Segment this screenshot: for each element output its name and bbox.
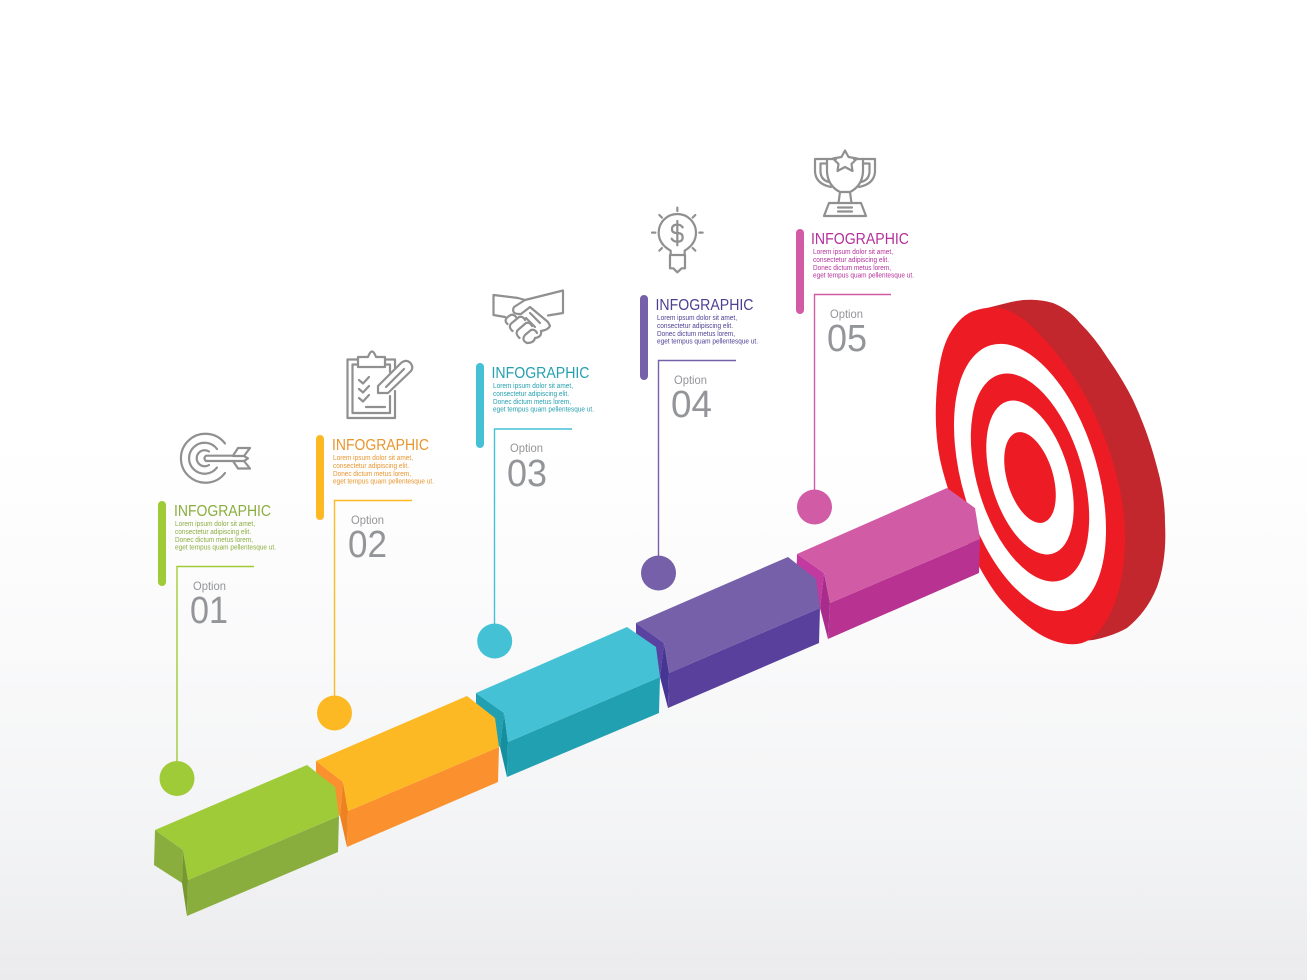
- marker 05: [797, 490, 832, 524]
- label 03: 03: [507, 453, 547, 495]
- marker 04: [641, 556, 676, 590]
- leader line 02: [334, 500, 412, 705]
- accent bar 01: [158, 501, 166, 586]
- body text 05: Donec dictum metus lorem,: [813, 265, 891, 272]
- heading 01: INFOGRAPHIC: [174, 503, 271, 520]
- accent bar 05: [796, 229, 804, 314]
- body text 04: consectetur adipiscing elit.: [657, 323, 733, 330]
- option 04 group: [640, 295, 758, 590]
- accent bar 04: [640, 295, 648, 380]
- leader line 04: [658, 360, 736, 565]
- body text 02: consectetur adipiscing elit.: [333, 463, 409, 470]
- body text 01: Donec dictum metus lorem,: [175, 537, 253, 544]
- body text 03: Lorem ipsum dolor sit amet,: [493, 383, 573, 390]
- body text 04: Donec dictum metus lorem,: [657, 331, 735, 338]
- icon: handshake: [494, 290, 563, 343]
- body text 04: Lorem ipsum dolor sit amet,: [657, 315, 737, 322]
- label 03: Option: [510, 441, 543, 455]
- segment 05: pink block: [796, 488, 980, 639]
- option 05 group: [796, 229, 914, 524]
- label 02: 02: [348, 524, 387, 566]
- body text 02: [333, 455, 434, 486]
- icon: light bulb with dollar: [652, 208, 703, 272]
- segment 03: teal block: [476, 627, 660, 777]
- segment 04: purple block: [636, 557, 820, 708]
- body text 05: Lorem ipsum dolor sit amet,: [813, 249, 893, 256]
- body text 01: consectetur adipiscing elit.: [175, 529, 251, 536]
- body text 02: eget tempus quam pellentesque ut.: [333, 478, 434, 486]
- body text 03: eget tempus quam pellentesque ut.: [493, 406, 594, 414]
- icon: target with arrow: [181, 434, 250, 483]
- label 02: Option: [351, 513, 384, 527]
- body text 03: [493, 383, 594, 414]
- segment 02: orange block: [316, 696, 499, 847]
- body text 03: consectetur adipiscing elit.: [493, 391, 569, 398]
- accent bar 03: [476, 363, 484, 448]
- heading 05: INFOGRAPHIC: [811, 231, 909, 248]
- icon: clipboard with pencil: [348, 352, 412, 418]
- body text 01: [175, 521, 276, 552]
- option 03 group: [476, 363, 594, 658]
- option 02 group: [316, 435, 434, 730]
- body text 02: Donec dictum metus lorem,: [333, 471, 411, 478]
- body text 01: eget tempus quam pellentesque ut.: [175, 544, 276, 552]
- label 05: 05: [827, 318, 867, 360]
- icon: trophy with star: [815, 150, 875, 216]
- label 05: Option: [830, 307, 863, 321]
- label 01: Option: [193, 579, 226, 593]
- segment 01: green block: [154, 765, 339, 916]
- body text 04: [657, 315, 758, 346]
- label 01: 01: [190, 590, 228, 632]
- leader line 05: [814, 294, 891, 499]
- body text 05: [813, 249, 914, 280]
- body text 01: Lorem ipsum dolor sit amet,: [175, 521, 255, 528]
- body text 05: eget tempus quam pellentesque ut.: [813, 272, 914, 280]
- target: red bullseye: [926, 300, 1165, 644]
- label 04: 04: [671, 384, 712, 426]
- heading 03: INFOGRAPHIC: [492, 365, 590, 382]
- marker 01: [160, 761, 194, 796]
- heading 02: INFOGRAPHIC: [332, 437, 429, 454]
- accent bar 02: [316, 435, 324, 520]
- body text 02: Lorem ipsum dolor sit amet,: [333, 455, 413, 462]
- label 04: Option: [674, 373, 707, 387]
- leader line 01: [177, 566, 254, 770]
- body text 04: eget tempus quam pellentesque ut.: [657, 338, 758, 346]
- body text 05: consectetur adipiscing elit.: [813, 257, 889, 264]
- leader line 03: [494, 429, 572, 633]
- heading 04: INFOGRAPHIC: [656, 297, 754, 314]
- option 01 group: [158, 501, 276, 796]
- marker 03: [477, 624, 512, 658]
- marker 02: [317, 696, 352, 730]
- body text 03: Donec dictum metus lorem,: [493, 399, 571, 406]
